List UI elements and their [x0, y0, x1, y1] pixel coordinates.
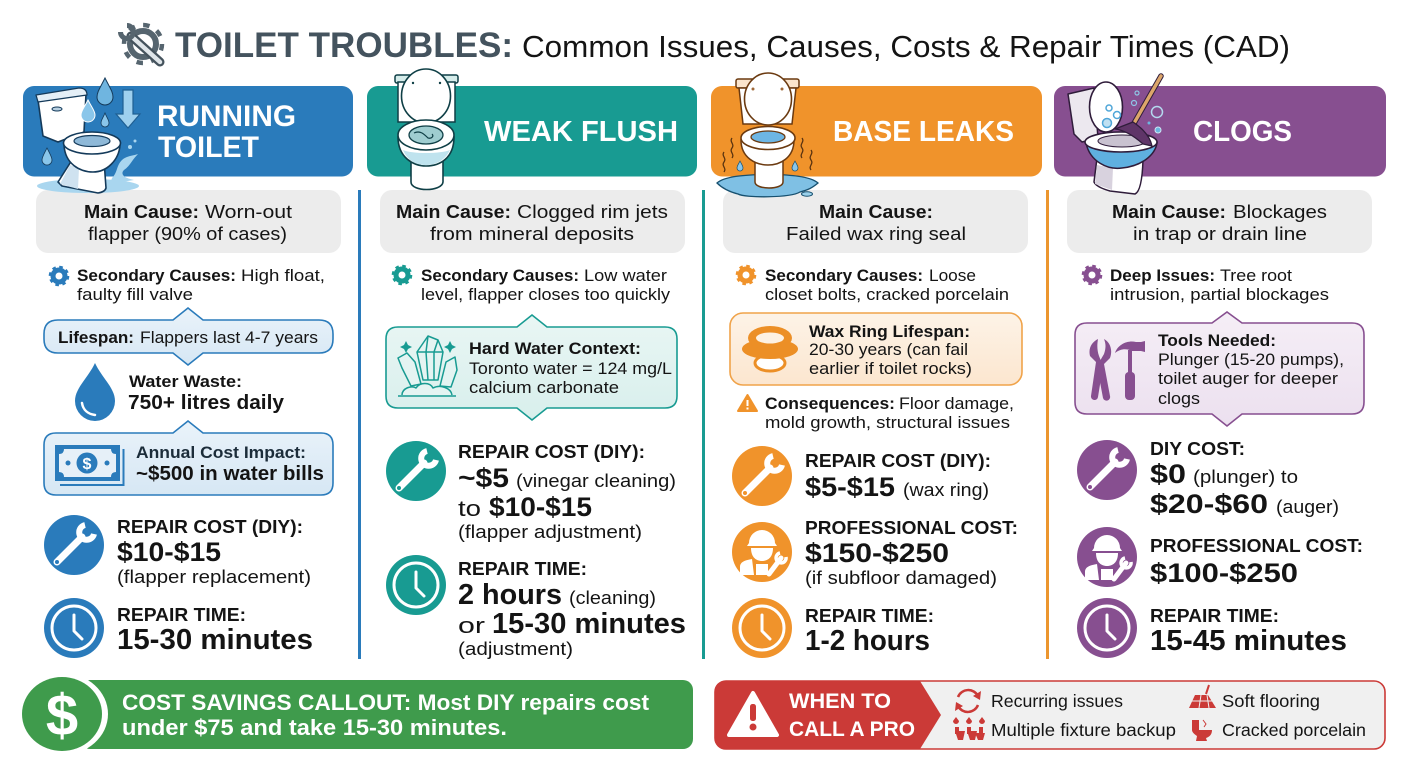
professional cost — [1077, 527, 1363, 588]
repair time text: REPAIR TIME: — [117, 604, 246, 625]
multiple fixture backup — [953, 717, 1176, 740]
heading: when to call a pro — [789, 689, 915, 741]
repair cost — [386, 441, 676, 542]
icon: warning — [729, 693, 777, 735]
icon: weak flush toilet — [395, 69, 458, 190]
secondary causes: Secondary Causes: — [77, 267, 236, 285]
secondary causes — [393, 266, 671, 304]
repair time text: 2 hours — [458, 579, 562, 611]
repair cost text: REPAIR COST (DIY): — [458, 441, 645, 462]
heading: clogs: CLOGS — [1193, 116, 1292, 148]
deep issues: intrusion, partial blockages — [1110, 286, 1329, 304]
repair cost text: to — [458, 496, 481, 521]
icon: money: $ — [83, 456, 92, 473]
repair time — [44, 598, 313, 658]
main cause: Clogged rim jets — [517, 201, 668, 222]
repair cost text: REPAIR COST (DIY): — [805, 450, 991, 471]
wax ring text: earlier if toilet rocks) — [809, 359, 972, 378]
callout: when to call a pro — [715, 681, 1385, 749]
secondary causes: Secondary Causes: — [765, 267, 923, 285]
tools needed text: Tools Needed: — [1158, 331, 1276, 350]
repair time — [1077, 598, 1347, 658]
icon: warning — [738, 395, 757, 411]
diy cost text: DIY COST: — [1150, 438, 1245, 459]
wax ring text: Wax Ring Lifespan: — [809, 322, 970, 341]
repair time text — [117, 604, 313, 656]
icon: wrench and gear — [120, 25, 162, 63]
consequences text: Floor damage, — [899, 395, 1014, 413]
repair time text: 15-45 minutes — [1150, 625, 1347, 657]
heading: when to call a pro: CALL A PRO — [789, 717, 915, 741]
hard water text: calcium carbonate — [469, 378, 619, 397]
diy cost text: (plunger) to — [1193, 466, 1298, 487]
repair time text: REPAIR TIME: — [805, 605, 934, 626]
panel: base leaks — [711, 73, 1042, 658]
repair time text — [458, 558, 686, 659]
main cause: Main Cause: — [396, 201, 511, 222]
main cause: Blockages — [1233, 201, 1327, 222]
repair time text: REPAIR TIME: — [1150, 605, 1279, 626]
cracked porcelain: Cracked porcelain — [1222, 720, 1366, 740]
callout: cost savings — [16, 673, 693, 755]
consequences text — [765, 395, 1014, 432]
icon: clock — [1077, 598, 1137, 658]
icon: clock — [386, 555, 446, 615]
cost savings text: COST SAVINGS CALLOUT: Most DIY repairs cost — [122, 690, 650, 715]
repair cost text: $10-$15 — [489, 492, 592, 522]
main cause — [723, 190, 1028, 253]
repair time text: 15-30 minutes — [117, 624, 313, 656]
repair cost text: (flapper replacement) — [117, 566, 311, 587]
professional cost text — [805, 517, 1018, 588]
main cause — [380, 190, 685, 253]
icon: crystals — [398, 336, 457, 396]
icon: wrench — [1077, 440, 1137, 500]
diy cost — [1077, 438, 1339, 519]
repair time text: 15-30 minutes — [492, 608, 686, 640]
secondary causes: Loose — [929, 267, 976, 285]
repair cost text: (wax ring) — [903, 479, 989, 500]
wax ring text — [809, 322, 972, 378]
icon: wrench — [732, 446, 792, 506]
professional cost text: PROFESSIONAL COST: — [805, 517, 1018, 538]
hard water text — [469, 339, 672, 397]
callout: lifespan: Lifespan: — [58, 328, 134, 347]
main cause: in trap or drain line — [1133, 223, 1307, 244]
repair cost — [732, 446, 991, 506]
secondary causes: closet bolts, cracked porcelain — [765, 286, 1009, 304]
annual cost text: ~$500 in water bills — [136, 463, 324, 485]
icon: clogged toilet with plunger — [1068, 76, 1162, 194]
soft flooring: Soft flooring — [1222, 691, 1320, 711]
panel: clogs — [1054, 76, 1386, 658]
multiple fixture backup: Multiple fixture backup — [991, 720, 1176, 740]
repair cost text: $10-$15 — [117, 537, 221, 567]
main cause: Main Cause: — [84, 201, 199, 222]
header: running toilet — [23, 78, 353, 193]
repair time text: REPAIR TIME: — [458, 558, 587, 579]
deep issues: Tree root — [1220, 267, 1292, 285]
secondary causes: High float, — [241, 267, 325, 285]
deep issues: Deep Issues: — [1110, 267, 1215, 285]
repair time text — [805, 605, 934, 657]
header: base leaks — [711, 73, 1042, 197]
secondary causes — [50, 267, 325, 304]
hard water text: Toronto water = 124 mg/L — [469, 359, 672, 378]
repair cost text: ~$5 — [458, 463, 509, 493]
water waste text: 750+ litres daily — [128, 391, 285, 414]
diy cost text: $0 — [1150, 459, 1186, 489]
callout: hard water context — [386, 315, 677, 420]
divider lines — [358, 190, 1049, 659]
heading: when to call a pro: WHEN TO — [789, 689, 891, 713]
professional cost text: (if subfloor damaged) — [805, 567, 997, 588]
callout: lifespan: Flappers last 4-7 years — [140, 328, 318, 347]
repair cost text: REPAIR COST (DIY): — [117, 516, 303, 537]
repair cost text — [458, 441, 676, 542]
icon: dollar coin: $ — [46, 683, 78, 748]
main cause — [36, 190, 341, 253]
secondary causes: faulty fill valve — [77, 286, 193, 304]
annual cost text — [136, 443, 324, 485]
secondary causes — [737, 266, 1009, 304]
repair cost text — [805, 450, 991, 502]
repair time — [386, 555, 686, 659]
panel: weak flush — [367, 69, 697, 659]
repair time text: or — [458, 613, 485, 638]
deep issues — [1083, 266, 1329, 304]
secondary causes: Secondary Causes: — [421, 267, 579, 285]
diy cost text: (auger) — [1276, 496, 1339, 517]
main cause: from mineral deposits — [430, 223, 634, 244]
annual cost text: Annual Cost Impact: — [136, 443, 306, 462]
callout: tools needed — [1075, 312, 1364, 426]
repair time text: 1-2 hours — [805, 625, 930, 657]
heading: running toilet: TOILET — [158, 131, 259, 164]
icon: water drop — [75, 363, 115, 421]
repair cost text — [117, 516, 311, 587]
main cause: Main Cause: — [1112, 201, 1226, 222]
cost savings text: under $75 and take 15-30 minutes. — [122, 715, 507, 740]
cost savings text — [122, 690, 650, 740]
icon: pliers and hammer — [1089, 339, 1145, 401]
icon: clock — [732, 598, 792, 658]
main cause — [1067, 190, 1372, 253]
header: clogs — [1054, 76, 1386, 194]
icon: wrench — [44, 515, 104, 575]
soft flooring — [1189, 685, 1320, 711]
water waste text: Water Waste: — [129, 373, 242, 391]
secondary causes: level, flapper closes too quickly — [421, 286, 671, 304]
icon: wax ring — [742, 326, 798, 371]
consequences — [738, 395, 1014, 432]
icon: running toilet — [36, 78, 140, 193]
diy cost text: $20-$60 — [1150, 489, 1268, 519]
heading: subtitle: Common Issues, Causes, Costs & Repair Times (CAD) — [522, 29, 1290, 64]
heading: running toilet — [157, 100, 296, 164]
title — [120, 25, 1290, 65]
repair cost text: (flapper adjustment) — [458, 521, 642, 542]
professional cost text: $150-$250 — [805, 538, 949, 568]
water waste text — [128, 373, 285, 414]
recurring issues: Recurring issues — [991, 691, 1123, 711]
diy cost text — [1150, 438, 1339, 519]
repair time text — [1150, 605, 1347, 657]
secondary causes: Low water — [584, 267, 668, 285]
heading: toilet troubles: TOILET TROUBLES: — [175, 26, 513, 65]
professional cost — [732, 517, 1018, 588]
heading: base leaks: BASE LEAKS — [833, 116, 1014, 148]
repair time text: (cleaning) — [569, 588, 656, 608]
callout: annual cost impact — [44, 421, 333, 495]
icon: clock — [44, 598, 104, 658]
icon: wrench — [386, 441, 446, 501]
callout: wax ring lifespan — [730, 313, 1022, 385]
main cause: flapper (90% of cases) — [88, 223, 287, 244]
hard water text: Hard Water Context: — [469, 339, 641, 358]
callout: lifespan — [44, 308, 333, 365]
water waste — [75, 363, 285, 421]
icon: leaking toilet — [717, 73, 818, 197]
repair time text: (adjustment) — [458, 638, 573, 659]
tools needed text — [1158, 331, 1344, 408]
consequences text: Consequences: — [765, 395, 895, 413]
repair cost — [44, 515, 311, 587]
professional cost text: $100-$250 — [1150, 558, 1298, 588]
icon: money — [55, 445, 124, 485]
repair time — [732, 598, 934, 658]
main cause: Worn-out — [205, 201, 292, 222]
heading: running toilet: RUNNING — [157, 100, 296, 133]
heading: weak flush: WEAK FLUSH — [484, 116, 678, 148]
tools needed text: clogs — [1158, 389, 1200, 408]
icon: dollar coin — [16, 673, 108, 755]
repair cost text: (vinegar cleaning) — [516, 471, 676, 491]
tools needed text: Plunger (15-20 pumps), — [1158, 350, 1344, 369]
wax ring text: 20-30 years (can fail — [809, 340, 968, 359]
professional cost text — [1150, 535, 1363, 588]
main cause: Main Cause: — [819, 201, 933, 222]
icon: worker — [732, 522, 792, 582]
professional cost text: PROFESSIONAL COST: — [1150, 535, 1363, 556]
header: weak flush — [367, 69, 697, 190]
consequences text: mold growth, structural issues — [765, 414, 1010, 432]
main cause: Failed wax ring seal — [786, 223, 966, 244]
panel: running toilet — [23, 78, 353, 658]
icon: worker — [1077, 527, 1137, 587]
repair cost text: $5-$15 — [805, 472, 895, 502]
tools needed text: toilet auger for deeper — [1158, 369, 1338, 388]
